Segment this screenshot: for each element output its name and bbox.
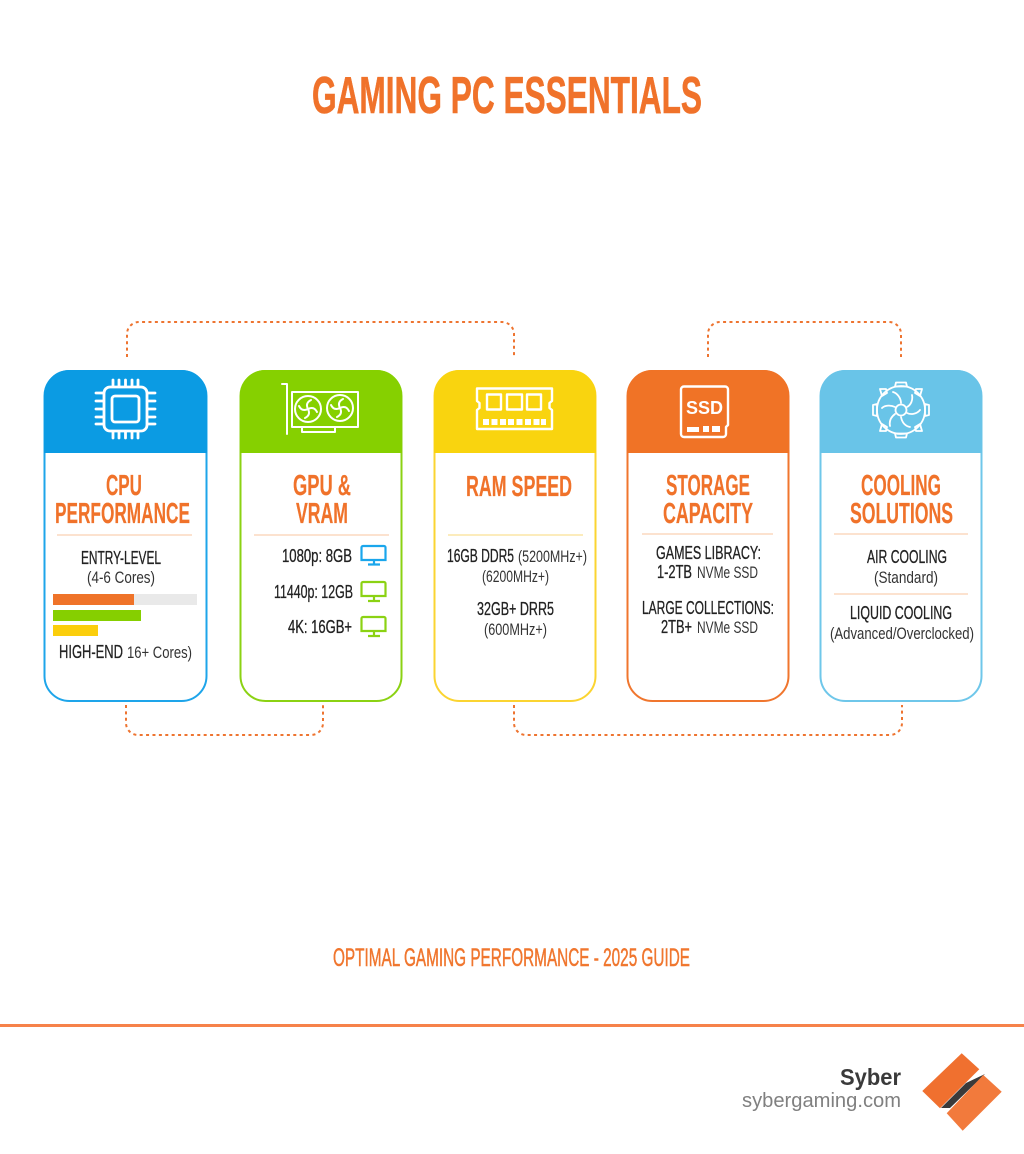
card header [44,370,207,453]
icon: green monitor [362,582,386,601]
option: liquid cooling: (Advanced/Overclocked) [830,624,974,643]
spec: games library [656,543,761,582]
panel: CPU performance [44,370,207,701]
heading: VRAM [296,498,348,530]
panel: RAM speed [434,370,596,701]
spec: games library: NVMe SSD [697,563,758,582]
spec: large collections: 2TB+ [661,617,692,637]
icon: CPU chip [96,380,155,438]
caption: OPTIMAL GAMING PERFORMANCE - 2025 GUIDE [333,944,690,972]
spec: 32GB DDR5 [477,599,554,639]
row: 1080p: 1080p: 8GB [282,546,352,566]
high-end label [59,642,192,662]
panel: cooling solutions [820,370,982,701]
title: GAMING PC ESSENTIALS [312,67,702,125]
heading [850,470,953,530]
card outline [44,371,206,701]
heading: CAPACITY [663,498,753,530]
high-end label: 16+ Cores) [127,643,192,662]
card outline [434,371,596,701]
spec: 16GB DDR5: (5200MHz+) [518,547,587,566]
spec: games library: 1-2TB [657,562,692,582]
card outline [240,371,402,701]
spec: large collections: LARGE COLLECTIONS: [642,598,774,618]
card header [627,370,789,453]
panel: storage capacity [627,370,789,701]
heading: STORAGE [666,470,750,502]
heading: GPU & [293,470,351,502]
icon: cooling fan [873,382,929,438]
card header [820,370,982,453]
connector: CPU to GPU [126,705,323,735]
spec: large collections [642,598,774,637]
entry-level label [81,548,161,587]
icon: SSD drive: SSD [686,398,723,418]
option: air cooling: AIR COOLING [867,547,947,567]
spec: large collections: NVMe SSD [697,618,758,637]
row: 1440p: 11440p: 12GB [274,582,353,602]
card header [434,370,596,453]
option: air cooling: (Standard) [874,568,938,587]
card outline [820,371,982,701]
card outline [628,371,788,701]
heading [293,470,351,530]
option: liquid cooling: LIQUID COOLING [850,603,952,623]
heading: CPU [106,470,142,502]
spec: 16GB DDR5: 16GB DDR5 [447,546,514,566]
entry-level label: ENTRY-LEVEL [81,548,161,568]
spec: 32GB DDR5: 32GB+ DRR5 [477,599,554,619]
option: liquid cooling [830,603,974,643]
connector: RAM to cooling [514,705,902,735]
panel: GPU and VRAM [240,370,402,701]
spec: games library: GAMES LIBRACY: [656,543,761,563]
logo [922,1053,1002,1131]
footer brand [742,1053,1002,1131]
brand url: sybergaming.com [742,1090,901,1112]
heading [55,470,190,530]
heading: SOLUTIONS [850,498,953,530]
connector: storage to cooling [708,322,901,357]
spec: 16GB DDR5 [447,546,587,586]
brand name: Syber [840,1064,901,1090]
icon: graphics card [282,384,358,434]
option: air cooling [867,547,947,587]
row: 4K: 4K: 16GB+ [288,617,352,637]
icon: green monitor [362,617,386,636]
heading: RAM SPEED [466,471,572,503]
connector: CPU to RAM [127,322,514,357]
bar chart: core tiers [53,594,197,636]
high-end label: HIGH-END [59,642,123,662]
icon: SSD drive [681,386,728,437]
entry-level label: (4-6 Cores) [87,568,155,587]
card header [240,370,402,453]
spec: 16GB DDR5: (6200MHz+) [482,567,549,586]
heading: COOLING [861,470,941,502]
heading: PERFORMANCE [55,498,190,530]
heading [663,470,753,530]
icon: RAM module [477,388,552,429]
spec: 32GB DDR5: (600MHz+) [484,620,547,639]
icon: blue monitor [362,546,386,564]
